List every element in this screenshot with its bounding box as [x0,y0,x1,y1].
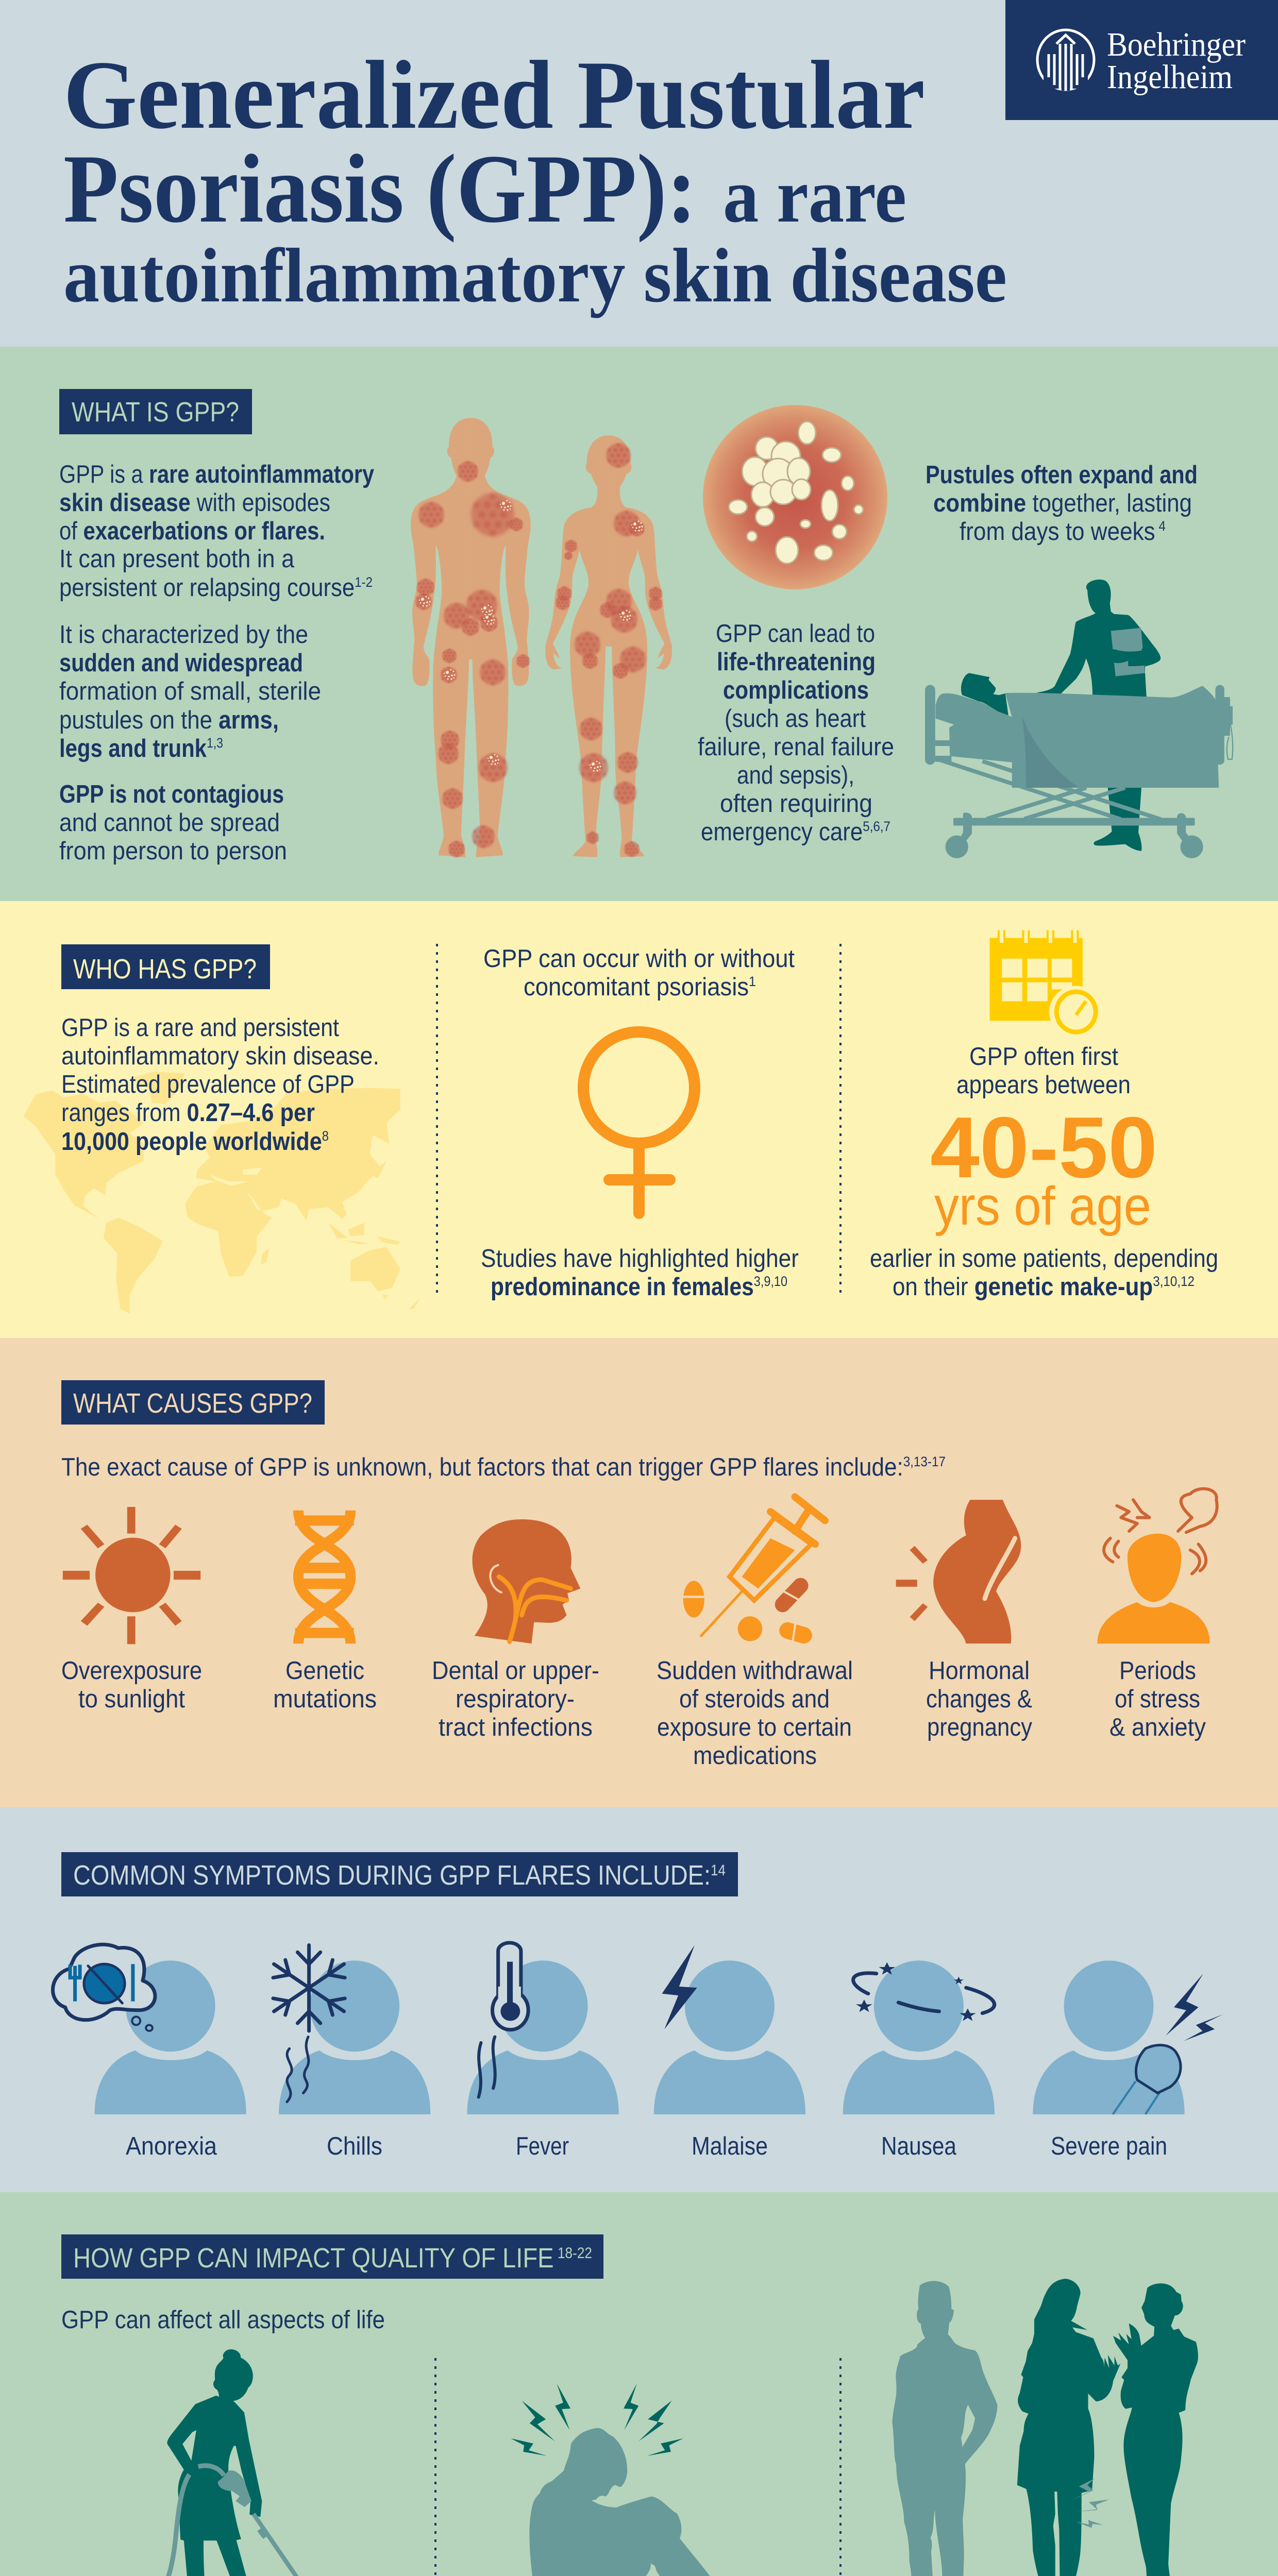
illustration: woman vacuuming [117,2349,365,2576]
text block: pustules expand: combine together, lasting [933,489,1192,517]
text block: what is GPP description: skin disease with episodes [59,489,330,517]
text block: complications: failure, renal failure [698,733,894,761]
icon: DNA [295,1511,354,1643]
text block: what is GPP description: pustules on the arms, [59,706,279,734]
text block: predominance in females [481,1245,799,1301]
text block: with or without psoriasis: concomitant psoriasis [524,973,766,1001]
title: Generalized Pustular [63,41,925,149]
text: causes intro: The exact cause of GPP is unknown, but factors that can trigger GPP flares include: [61,1453,998,1481]
text block: onset age: GPP often first [969,1043,1118,1071]
text block: complications: 5,6,7 [863,819,890,834]
text block: prevalence: autoinflammatory skin disease. [61,1042,379,1070]
text block: complications: GPP can lead to [716,620,875,648]
text block: complications: complications [723,676,869,704]
heading: common symptoms: COMMON SYMPTOMS DURING GPP FLARES INCLUDE: [73,1860,806,1891]
heading: quality of life: HOW GPP CAN IMPACT QUALITY OF LIFE [73,2243,623,2274]
text block: complications: emergency care [701,818,882,846]
causes labels: pregnancy [927,1714,1032,1741]
logo: Boehringer Ingelheim: Ingelheim [1107,58,1233,96]
causes labels: to sunlight [78,1685,185,1713]
causes labels: medications [693,1742,817,1770]
world map [24,1072,419,1314]
text block: what is GPP description: of exacerbations or flares. [59,517,325,545]
text block: predominance in females: 3,9,10 [754,1274,787,1289]
text block: pustules expand [926,461,1198,546]
illustration: pustule close-up [703,405,887,589]
causes labels: exposure to certain [657,1714,852,1741]
text block: what is GPP description: GPP is a rare autoinflammatory [59,461,374,488]
causes labels [61,1657,1206,1770]
symptom labels: Anorexia [126,2132,217,2160]
symptom: severe pain [1033,1960,1223,2114]
text block: onset age: appears between [956,1071,1131,1099]
text block: onset age [870,1043,1218,1301]
heading: quality of life: 18-22 [554,2245,592,2262]
heading: what causes GPP: WHAT CAUSES GPP? [73,1388,312,1419]
text block: pustules expand: Pustules often expand and [926,461,1198,489]
text block: what is GPP description: 1,3 [207,735,223,751]
heading: who has GPP [61,944,270,989]
text block: onset age: yrs of age [934,1176,1151,1236]
icon: pregnant silhouette [896,1500,1021,1643]
symptom labels [126,2132,1167,2160]
text block: what is GPP description: from person to person [59,837,287,865]
heading: quality of life [61,2234,603,2279]
text block: complications: (such as heart [725,705,866,733]
symptom labels: Severe pain [1051,2132,1167,2160]
text block: what is GPP description: 1-2 [355,574,373,590]
text block: what is GPP description: It can present both in a [59,545,295,573]
text block: complications: often requiring [720,790,872,818]
text block: prevalence: 10,000 people worldwide [61,1128,322,1156]
symptom labels: Malaise [692,2132,768,2160]
symptom: nausea [843,1960,995,2114]
text block: what is GPP description: GPP is not contagious [59,781,284,808]
causes labels: Dental or upper- [432,1657,599,1685]
causes labels: Hormonal [929,1657,1030,1685]
illustration: man and two women talking [892,2279,1198,2576]
causes labels: of steroids and [679,1685,830,1713]
icon: sun [63,1507,200,1644]
causes labels: Overexposure [61,1657,202,1685]
text block: prevalence: 8 [322,1128,329,1144]
icon: syringe and pills [683,1497,825,1643]
text block: complications: life-threatening [717,648,876,676]
icon: calendar and clock [990,930,1103,1038]
text block: what is GPP description: It is characterized by the [59,621,308,649]
heading: what is GPP [59,389,252,434]
symptom labels: Nausea [881,2132,957,2160]
text block: what is GPP description: persistent or relapsing course [59,574,391,602]
illustration: doctor and patient on hospital bed [925,580,1233,858]
icon: head with airway [472,1519,580,1643]
causes labels: mutations [273,1685,377,1713]
text block: what is GPP description: formation of small, sterile [59,677,321,705]
title: Psoriasis (GPP): [63,135,697,243]
symptom: fever [467,1943,619,2114]
title: autoinflammatory skin disease [63,233,1007,318]
logo: Boehringer Ingelheim [1005,0,1278,120]
causes labels: tract infections [439,1714,593,1741]
heading: what is GPP: WHAT IS GPP? [72,397,239,428]
text block: complications: and sepsis), [737,761,854,789]
text block: prevalence: Estimated prevalence of GPP [61,1071,355,1098]
text block: what is GPP description: legs and trunk [59,735,207,762]
text block: prevalence [61,1014,379,1156]
text block: pustules expand: from days to weeks [960,518,1177,546]
illustration: male and female bodies with lesions [411,418,672,857]
icon: stressed person [1097,1489,1217,1643]
symptom: anorexia [53,1944,246,2114]
text block: with or without psoriasis [483,945,795,1001]
text block: prevalence: ranges from 0.27–4.6 per [61,1099,315,1127]
title: a rare [723,153,906,239]
text: causes intro: 3,13-17 [903,1454,946,1469]
symptom: chills [273,1945,430,2114]
text block: onset age: on their genetic make-up [893,1273,1173,1301]
text block: what is GPP description: sudden and widespread [59,649,303,677]
heading: who has GPP: WHO HAS GPP? [73,954,257,985]
text block: complications [698,620,894,846]
text block: predominance in females: predominance in females [491,1273,754,1301]
causes labels: & anxiety [1109,1714,1206,1741]
causes labels: respiratory- [456,1685,575,1713]
text block: with or without psoriasis: 1 [749,974,756,989]
heading: common symptoms [61,1852,738,1896]
causes labels: changes & [926,1685,1032,1713]
causes labels: Sudden withdrawal [657,1657,853,1685]
illustration: sitting person with headache bolts [511,2384,768,2576]
causes labels: of stress [1115,1685,1200,1713]
symptom: malaise [654,1945,805,2114]
text block: pustules expand: 4 [1155,518,1166,534]
text: affect all aspects: GPP can affect all aspects of life [61,2306,385,2334]
symptom labels: Fever [516,2132,569,2160]
symptom labels: Chills [327,2132,382,2160]
heading: common symptoms: 14 [711,1862,726,1879]
text block: with or without psoriasis: GPP can occur with or without [483,945,795,973]
text block: what is GPP description [59,461,374,865]
causes labels: Periods [1119,1657,1196,1685]
heading: what causes GPP [61,1380,325,1425]
text block: onset age: earlier in some patients, depending [870,1245,1218,1273]
text block: onset age: 3,10,12 [1153,1274,1195,1289]
text block: predominance in females: Studies have highlighted higher [481,1245,799,1273]
text block: what is GPP description: and cannot be spread [59,809,280,837]
icon: female symbol [583,1032,695,1213]
causes labels: Genetic [285,1657,364,1685]
text block: onset age: 40-50 [930,1099,1157,1196]
text block: prevalence: GPP is a rare and persistent [61,1014,339,1042]
title [63,41,1007,318]
logo: Boehringer Ingelheim: Boehringer [1107,26,1246,63]
